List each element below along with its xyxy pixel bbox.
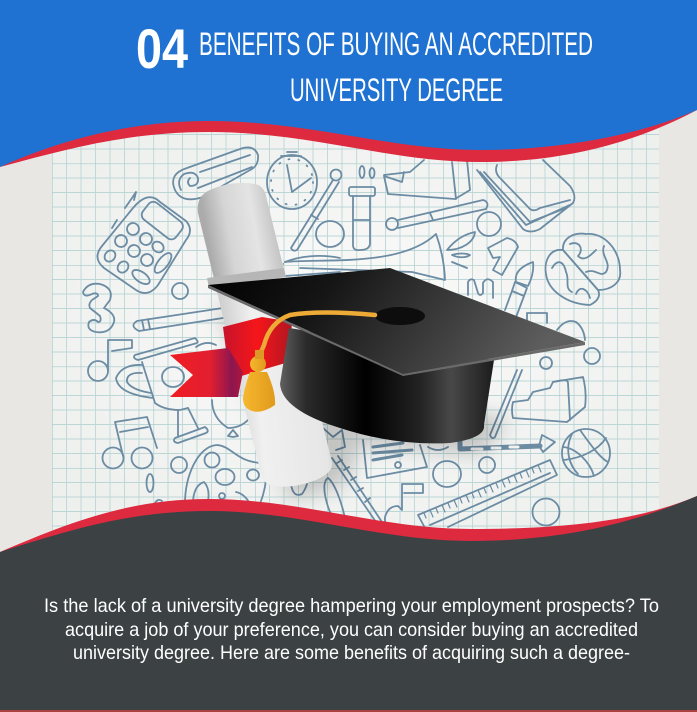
doodle illustrations	[83, 147, 620, 528]
doodle: squiggle	[468, 279, 493, 298]
doodle: phone stack	[477, 160, 574, 232]
doodle: circles top	[316, 212, 501, 247]
doodle: number three	[83, 284, 114, 332]
doodle: paintbrush top	[505, 262, 533, 320]
doodle: long pencil	[324, 456, 382, 526]
doodle: rolled paper	[173, 147, 258, 199]
graph paper	[52, 125, 659, 530]
doodle: small shapes left	[146, 457, 187, 503]
tassel	[243, 350, 275, 412]
doodle: page note	[363, 440, 427, 478]
doodle: trumpet	[280, 234, 445, 280]
doodle: small circle left	[172, 283, 188, 299]
doodle: basketball	[562, 429, 610, 477]
ribbon band	[223, 317, 292, 377]
title: UNIVERSITY DEGREE	[290, 72, 503, 108]
doodle: trophy cup	[116, 338, 216, 443]
doodle: palette	[185, 445, 266, 510]
doodle: blob under ribbon	[212, 400, 248, 437]
doodle: drops	[360, 166, 374, 178]
doodle: long brush	[490, 370, 522, 438]
doodle: music note center	[385, 484, 423, 528]
doodle: long stick	[291, 170, 342, 251]
doodle: tool	[386, 200, 487, 230]
doodle: stopwatch	[267, 152, 317, 209]
tassel cord	[261, 312, 375, 352]
ribbon tail	[170, 348, 243, 397]
doodle: bottom circles	[428, 447, 560, 526]
doodle: cheese box	[384, 160, 470, 199]
doodle: right shapes	[527, 313, 600, 369]
intro paragraph: university degree. Here are some benefits of acquiring such a degree-	[73, 642, 630, 664]
intro paragraph: acquire a job of your preference, you can consider buying an accredited	[65, 619, 638, 641]
doodle: star zigzag	[323, 428, 345, 450]
intro paragraph	[44, 595, 659, 664]
cap body	[280, 328, 494, 443]
doodle: number seven	[488, 238, 518, 275]
doodle: cheese right	[512, 377, 586, 422]
doodle: arrow pencil	[460, 435, 555, 452]
doodle: ruler	[418, 460, 557, 528]
diploma scroll	[198, 183, 332, 487]
cap board	[208, 268, 585, 374]
top blue banner with red wave	[0, 0, 697, 167]
doodle: pencil	[133, 308, 223, 331]
doodle: brain	[546, 234, 620, 305]
title	[199, 26, 593, 108]
graduation cap	[208, 268, 585, 443]
doodle: test tube	[349, 187, 375, 250]
doodle: calculator	[97, 192, 190, 293]
doodle: cup fragment	[291, 484, 307, 495]
title number: 04	[136, 17, 188, 80]
doodle: music note lower left	[102, 417, 157, 468]
intro paragraph: Is the lack of a university degree hampering your employment prospects? To	[44, 595, 659, 617]
cap button	[375, 307, 425, 325]
doodle: splash	[447, 232, 475, 268]
bottom dark panel with red wave	[0, 496, 697, 712]
cap board edge	[208, 285, 585, 376]
doodle: music note left	[88, 340, 132, 381]
shadow under scroll and cap	[215, 300, 510, 500]
